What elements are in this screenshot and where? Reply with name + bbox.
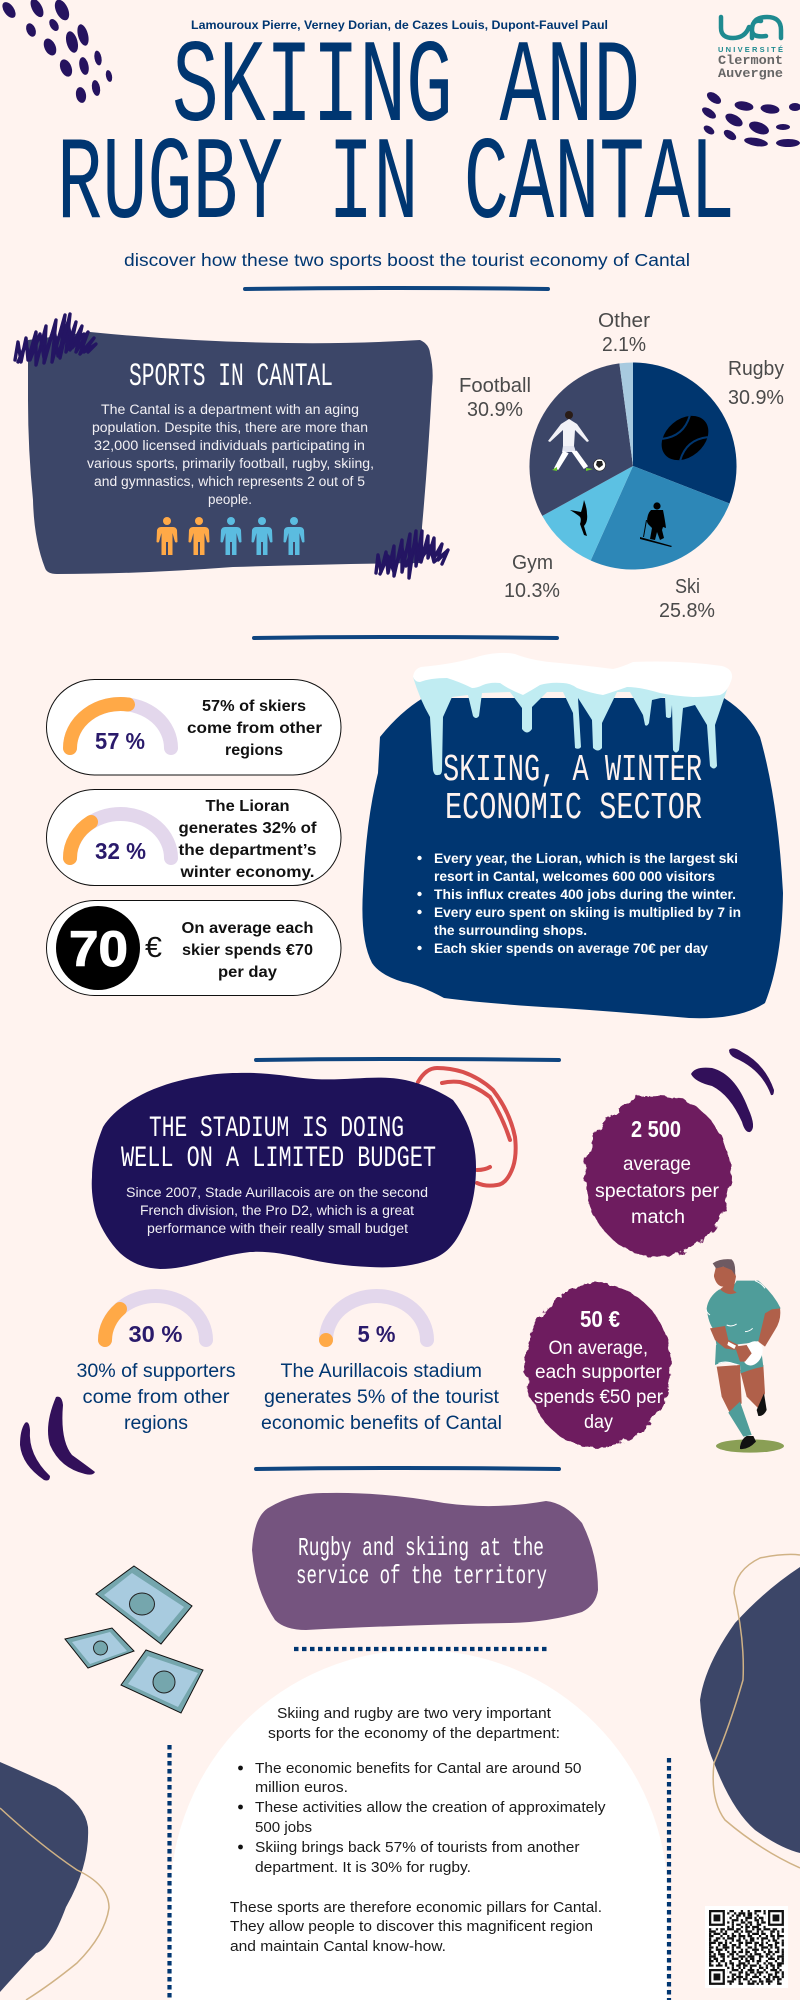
stat circle: 2 500 spectators: spectators per: [595, 1181, 720, 1202]
pie label: gym: 10.3%: [504, 580, 560, 602]
authors: Lamouroux Pierre, Verney Dorian, de Cazes Louis, Dupont-Fauvel Paul: [191, 20, 608, 32]
stat circle: 2 500 spectators: match: [631, 1207, 685, 1228]
stat pill: 57% of skiers: [46, 680, 341, 775]
text block: conclusion closing: These sports are therefore economic pillars for Cantal.: [230, 1900, 602, 1916]
stat circle: 50 euro: On average,: [548, 1338, 648, 1359]
panel: stadium budget: [92, 1073, 476, 1269]
panel: rugby and skiing heading: service of the territory: [296, 1561, 547, 1591]
gauge: 30 percent: [105, 1296, 206, 1347]
text block: stadium body: [126, 1185, 428, 1236]
text block: skiing bullets: Every euro spent on skiing is multiplied by 7 in: [434, 905, 741, 920]
text: 70 euro: per day: [218, 964, 277, 981]
chart: sports pie chart: [459, 310, 784, 622]
gauge: 32 percent: [70, 814, 171, 864]
pie slice: other: [619, 362, 633, 466]
logo: Université Clermont Auvergne: UNIVERSITÉ: [718, 45, 783, 54]
pie label: other: Other: [598, 310, 650, 332]
stat pill: 70 euro: [46, 900, 341, 996]
text block: conclusion bullets: Skiing brings back 57% of tourists from another: [255, 1840, 580, 1856]
text block: conclusion bullets: 500 jobs: [255, 1820, 312, 1836]
heading: sports in Cantal: SPORTS IN CANTAL: [129, 358, 333, 395]
text: 30% of supporters: regions: [124, 1413, 188, 1434]
icon: QR code: [705, 1906, 788, 1988]
text: 30% of supporters: [76, 1361, 236, 1434]
icon: black circle 70: 70: [69, 921, 128, 977]
pie label: ski: 25.8%: [659, 600, 715, 622]
text block: stadium body: Since 2007, Stade Aurillacois are on the second: [126, 1185, 428, 1200]
text block: conclusion bullets: These activities allow the creation of approximately: [255, 1800, 606, 1816]
text block: skiing bullets: Each skier spends on average 70€ per day: [434, 941, 708, 956]
text block: conclusion intro: [268, 1706, 560, 1742]
text block: sports intro: people.: [208, 492, 252, 507]
stat circle: 50 euro: day: [584, 1412, 613, 1433]
text block: skiing bullets: Every year, the Lioran, which is the largest ski: [434, 851, 738, 866]
pie label: football: [459, 375, 531, 421]
text: Lioran 32%: The Lioran: [206, 798, 290, 815]
text: 30% of supporters: 30% of supporters: [76, 1361, 236, 1382]
text: 57% of skiers: regions: [225, 742, 283, 759]
pie label: football: Football: [459, 375, 531, 397]
text block: skiing bullets: resort in Cantal, welcomes 600 000 visitors: [434, 869, 715, 884]
pie slice: gym: [542, 466, 633, 560]
text: 70 euro: [182, 920, 314, 981]
decoration: dots top right: [700, 90, 800, 148]
pie label: rugby: [728, 358, 784, 409]
stat pill: Lioran 32%: [46, 790, 341, 886]
text: Lioran 32%: generates 32% of: [178, 820, 317, 837]
heading: stadium doing well: [121, 1112, 436, 1176]
panel: skiing winter economic sector: [362, 653, 783, 1018]
text block: skiing bullets: [417, 851, 741, 956]
banknote 3: [121, 1650, 203, 1713]
text block: conclusion closing: and maintain Cantal know-how.: [230, 1939, 446, 1955]
text block: sports intro: [87, 402, 374, 507]
text block: conclusion closing: [230, 1900, 602, 1955]
icon: five people: [156, 517, 304, 555]
text block: stadium body: performance with their really small budget: [147, 1221, 408, 1236]
gauge: 30 percent: 30 %: [128, 1321, 182, 1347]
text: Lioran 32%: winter economy.: [179, 864, 314, 881]
text: 57% of skiers: [187, 698, 322, 759]
text: 57% of skiers: 57% of skiers: [202, 698, 306, 715]
decoration: purple swooshes bottom left: [20, 1397, 95, 1480]
decoration: purple swooshes top right: [691, 1048, 774, 1132]
text: 70 euro: On average each: [182, 920, 314, 937]
decoration: scribble top left: [15, 314, 96, 365]
stat circle: 50 euro: 50 €: [580, 1306, 620, 1332]
text: 30% of supporters: come from other: [82, 1387, 230, 1408]
stat circle: 2 500 spectators: 2 500: [631, 1116, 681, 1142]
text: 70 euro: skier spends €70: [182, 942, 313, 959]
pie label: football: 30.9%: [467, 399, 523, 421]
icon: football player: [548, 411, 606, 471]
pie slice: rugby: [633, 362, 737, 504]
text block: sports intro: population. Despite this, there are more than: [92, 420, 368, 435]
pie label: rugby: Rugby: [728, 358, 784, 380]
subtitle: discover how these two sports boost the tourist economy of Cantal: [124, 250, 690, 270]
decoration: scribble bottom right: [376, 531, 448, 578]
text block: conclusion intro: Skiing and rugby are two very important: [277, 1706, 551, 1722]
text block: sports intro: and gymnastics, which represents 2 out of 5: [94, 474, 365, 489]
stat circle: 50 euro: spends €50 per: [534, 1387, 664, 1408]
text block: conclusion intro: sports for the economy of the department:: [268, 1726, 560, 1742]
pie label: other: [598, 310, 650, 356]
pie label: other: 2.1%: [602, 334, 646, 356]
text block: sports intro: various sports, primarily football, rugby, skiing,: [87, 456, 374, 471]
stat circle: 2 500 spectators: average: [623, 1154, 691, 1175]
stat circle: 50 euro: [525, 1284, 671, 1448]
logo: Université Clermont Auvergne: [718, 17, 783, 81]
euro sign: €: [145, 932, 162, 964]
icon: rugby ball: [653, 407, 717, 469]
text block: skiing bullets: This influx creates 400 jobs during the winter.: [434, 887, 736, 902]
text: Aurillacois stadium 5%: generates 5% of the tourist: [264, 1387, 500, 1408]
text block: conclusion bullets: million euros.: [255, 1780, 348, 1796]
text: Aurillacois stadium 5%: The Aurillacois stadium: [280, 1361, 482, 1382]
heading: stadium doing well: WELL ON A LIMITED BUDGET: [121, 1142, 436, 1176]
pie slice: football: [529, 363, 633, 516]
text block: conclusion bullets: department. It is 30% for rugby.: [255, 1860, 471, 1876]
gauge: 5 percent: 5 %: [358, 1321, 396, 1347]
title: [57, 23, 735, 253]
banknote 1: [96, 1566, 192, 1644]
pie label: gym: Gym: [512, 552, 553, 574]
logo: Université Clermont Auvergne: Clermont: [718, 53, 783, 68]
gauge: 32 percent: 32 %: [95, 838, 146, 864]
text block: sports intro: The Cantal is a department with an aging: [101, 402, 359, 417]
pie label: gym: [504, 552, 560, 602]
pie label: rugby: 30.9%: [728, 387, 784, 409]
text block: conclusion bullets: [238, 1761, 606, 1876]
text: Aurillacois stadium 5%: economic benefits of Cantal: [261, 1413, 502, 1434]
pie label: ski: [659, 576, 715, 622]
logo: Université Clermont Auvergne: Auvergne: [718, 66, 783, 81]
decoration: right navy blob: [700, 1554, 800, 1868]
text block: skiing bullets: the surrounding shops.: [434, 923, 587, 938]
decoration: dots top left: [0, 0, 113, 104]
panel: conclusion white arch: [170, 1650, 668, 2000]
stat circle: 2 500 spectators: [585, 1095, 731, 1257]
pie slice: ski: [591, 466, 730, 570]
panel: rugby and skiing heading: Rugby and skiing at the: [298, 1533, 544, 1563]
decoration: left navy blob: [0, 1762, 109, 2000]
panel: rugby and skiing heading: [252, 1493, 598, 1630]
panel: sports in Cantal: [28, 332, 433, 574]
text: Lioran 32%: the department’s: [178, 842, 316, 859]
icon: rugby player: [706, 1259, 784, 1453]
gauge: 57 percent: 57 %: [95, 728, 145, 754]
gauge: 5 percent: [319, 1296, 427, 1347]
heading: stadium doing well: THE STADIUM IS DOING: [149, 1112, 404, 1146]
icon: banknotes: [65, 1566, 203, 1713]
stat circle: 50 euro: each supporter: [535, 1362, 663, 1383]
pie label: ski: Ski: [675, 576, 700, 598]
decoration: red swirl: [418, 1068, 516, 1186]
heading: skiing, a winter economic sector: [443, 749, 702, 830]
heading: skiing, a winter economic sector: SKIING, A WINTER: [443, 749, 702, 792]
text: Aurillacois stadium 5%: [261, 1361, 502, 1434]
icon: skier: [640, 502, 672, 547]
banknote 2: [65, 1628, 134, 1668]
icon: ice drips: [413, 672, 732, 775]
text block: conclusion closing: They allow people to discover this magnificent region: [230, 1919, 593, 1935]
icon: gymnast: [570, 500, 587, 536]
icon: snow cap: [413, 653, 732, 697]
text block: stadium body: French division, the Pro D2, which is a great: [140, 1203, 414, 1218]
text: Lioran 32%: [178, 798, 317, 881]
heading: skiing, a winter economic sector: ECONOMIC SECTOR: [445, 787, 702, 830]
text: 57% of skiers: come from other: [187, 720, 322, 737]
icon: black circle 70: [56, 906, 140, 990]
text block: conclusion bullets: The economic benefits for Cantal are around 50: [255, 1761, 582, 1777]
gauge: 57 percent: [70, 704, 171, 754]
text block: sports intro: 32,000 licensed individuals participating in: [94, 438, 365, 453]
